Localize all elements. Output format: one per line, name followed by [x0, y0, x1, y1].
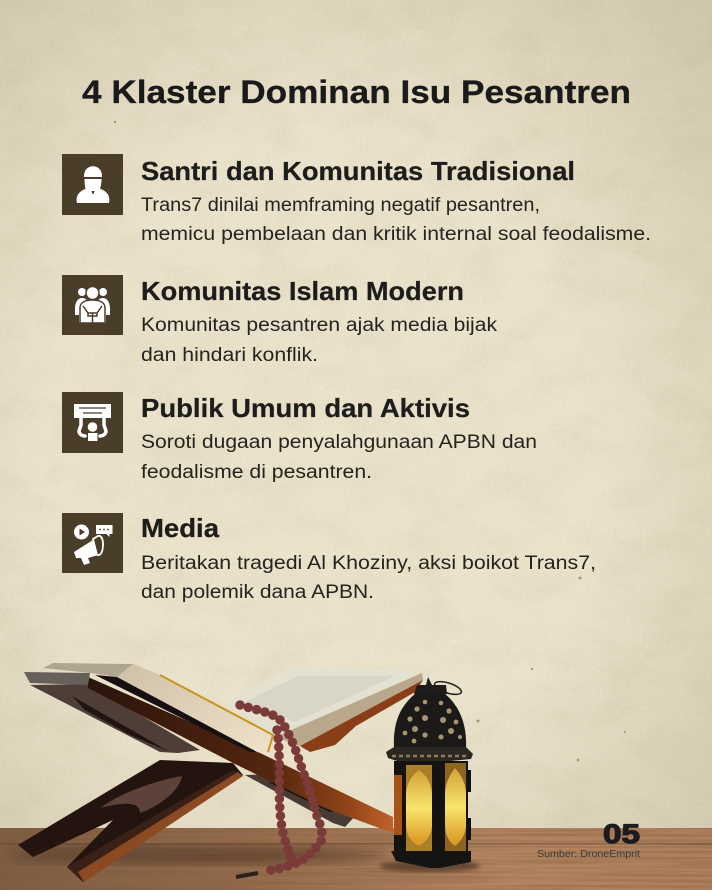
- text block: Komunitas pesantren ajak media bijak: [141, 315, 498, 336]
- prayer beads: [240, 705, 322, 871]
- panel: Publik Umum dan Aktivis: [62, 392, 537, 483]
- icon: community group: [62, 275, 123, 335]
- text block: [141, 315, 498, 366]
- heading: Publik Umum dan Aktivis: [141, 393, 470, 423]
- background: wooden table: [0, 828, 712, 890]
- lantern body: [394, 761, 468, 851]
- left lower leg: [18, 760, 243, 882]
- right lower board with cutout: [245, 774, 356, 827]
- icon: santri: [62, 154, 123, 215]
- text block: feodalisme di pesantren.: [141, 462, 372, 483]
- heading: Komunitas Islam Modern: [141, 276, 464, 306]
- panel: Komunitas Islam Modern: [62, 275, 498, 366]
- icon: protester with banner: [62, 392, 123, 453]
- text block: [141, 432, 537, 483]
- lantern dome: [394, 693, 466, 748]
- panel: Media: [62, 513, 596, 603]
- panel: Santri dan Komunitas Tradisional: [62, 154, 651, 245]
- brown spine board: [88, 677, 393, 833]
- text block: dan polemik dana APBN.: [141, 582, 374, 603]
- text block: dan hindari konflik.: [141, 345, 318, 366]
- text block: Trans7 dinilai memframing negatif pesantren,: [141, 195, 540, 216]
- lantern cap: [414, 677, 447, 694]
- heading: Santri dan Komunitas Tradisional: [141, 156, 575, 186]
- grey board edge: [24, 672, 90, 685]
- left pages block: [117, 664, 273, 753]
- upper left board underside: [30, 684, 200, 753]
- text block: memicu pembelaan dan kritik internal soal feodalisme.: [141, 224, 651, 245]
- source: Sumber: DroneEmprit: [537, 848, 640, 860]
- lantern base: [391, 851, 471, 868]
- lantern glass left: [406, 765, 432, 851]
- text block: Soroti dugaan penyalahgunaan APBN dan: [141, 432, 537, 453]
- lantern glass right: [445, 763, 466, 851]
- page number: 05: [603, 819, 640, 849]
- text block: [141, 553, 596, 603]
- text block: [141, 195, 651, 245]
- right open pages: [227, 668, 422, 738]
- right wood board: [300, 680, 423, 752]
- heading: Media: [141, 513, 220, 543]
- text block: Beritakan tragedi Al Khoziny, aksi boikot Trans7,: [141, 553, 596, 574]
- lantern ring: [433, 679, 463, 697]
- lantern band: [386, 747, 473, 762]
- illustration: Quran on wooden rehal: [10, 663, 423, 882]
- illustration: lantern: [380, 677, 480, 872]
- left page cover: [43, 663, 133, 677]
- icon: media megaphone: [62, 513, 123, 573]
- title: 4 Klaster Dominan Isu Pesantren: [82, 74, 631, 110]
